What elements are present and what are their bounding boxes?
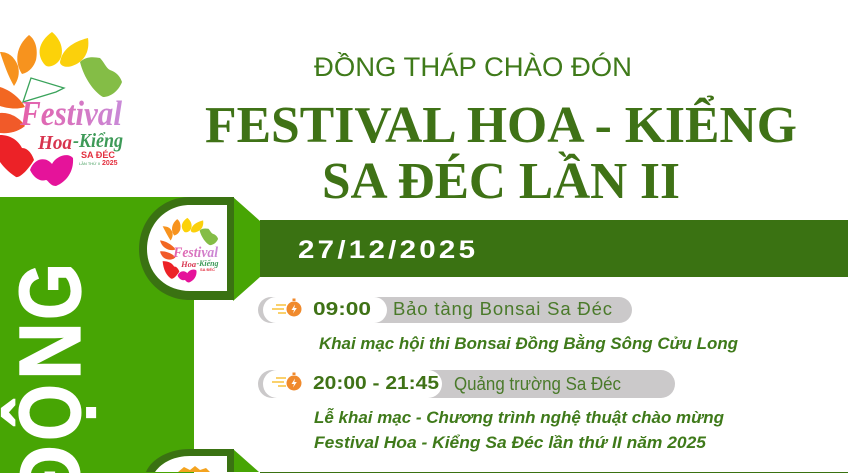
logo: Festival Hoa-Kiểng: [0, 32, 123, 186]
small logo: SA ĐÉC: [200, 267, 215, 272]
title line 1: FESTIVAL HOA - KIỂNG: [205, 95, 797, 154]
next date tab: [146, 449, 848, 473]
vertical label: động: Ộ: [2, 384, 99, 441]
row 2 description line 1: Lễ khai mạc - Chương trình nghệ thuật chào mừng: [314, 407, 724, 427]
vertical label: động: G: [2, 263, 99, 320]
location: Quảng trường Sa Đéc: [454, 373, 621, 394]
date bar: [260, 220, 848, 277]
title line 2: SA ĐÉC LẦN II: [322, 150, 680, 210]
time: 20:00 - 21:45: [313, 373, 439, 393]
schedule row 2: pill: [258, 370, 675, 398]
date tab connector: [233, 197, 260, 301]
small logo: Festival: [172, 245, 219, 261]
logo: Festival Hoa-Kiểng: SA ĐÉC: [81, 150, 116, 160]
icon: stopwatch: [272, 298, 302, 316]
logo: Festival Hoa-Kiểng: Hoa: [37, 132, 72, 154]
logo: Festival Hoa-Kiểng: Festival: [19, 94, 122, 133]
heading: Đồng Tháp chào đón: ĐỒNG THÁP CHÀO ĐÓN: [314, 51, 632, 82]
row 1 description: Khai mạc hội thi Bonsai Đồng Bằng Sông Cửu Long: [319, 334, 738, 353]
logo: Festival Hoa-Kiểng: LẦN THỨ II: [79, 161, 100, 166]
small logo: [160, 218, 219, 283]
icon: stopwatch: [272, 372, 302, 390]
time: 09:00: [313, 299, 371, 319]
logo: Festival Hoa-Kiểng: 2025: [102, 160, 118, 167]
logo: Festival Hoa-Kiểng: -Kiểng: [73, 130, 123, 152]
date: 27/12/2025: [298, 235, 475, 263]
row 2 description line 2: Festival Hoa - Kiểng Sa Đéc lần thứ II năm 2025: [314, 434, 707, 452]
panel: green side band: [0, 197, 194, 473]
small logo: -Kiểng: [197, 258, 219, 268]
small logo: Hoa: [180, 259, 197, 269]
vertical label: động: N: [2, 322, 99, 380]
logo badge: [139, 197, 234, 300]
schedule row 1: pill: [258, 297, 632, 323]
location: Bảo tàng Bonsai Sa Đéc: [393, 298, 612, 319]
vertical label: động: [2, 263, 99, 473]
